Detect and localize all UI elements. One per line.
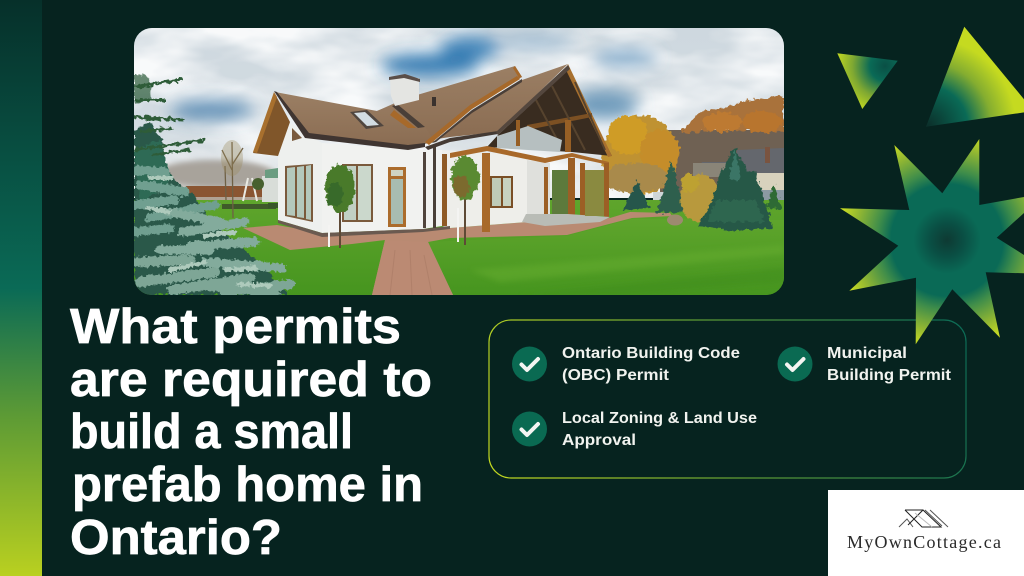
right lawn (479, 246, 784, 295)
permit text 3: Approval (562, 432, 636, 449)
house windows and door (285, 128, 513, 227)
permit text 2: Building Permit (827, 367, 951, 384)
logo box (828, 490, 1024, 576)
decorative triangle large (926, 27, 1024, 127)
title: prefab home in (72, 458, 423, 512)
background lawn (134, 200, 784, 295)
check icon 1 (512, 346, 547, 382)
logo icon: rooflines (899, 510, 948, 527)
middle ground hedges and play structure (221, 140, 281, 218)
house roof and gables (253, 64, 570, 156)
photo: house with lawn and trees (134, 28, 784, 295)
decorative triangle small (837, 53, 898, 109)
checklist panel (489, 320, 966, 478)
distant hillside and autumn trees (152, 96, 784, 206)
far white building (653, 147, 784, 200)
title: What permits (70, 300, 401, 354)
decorative eight-point star (840, 139, 1024, 344)
title: are required to (70, 353, 432, 407)
right side spruces and shrubs (623, 147, 782, 231)
large blue spruce at left (134, 75, 290, 295)
covered porch and timber posts (450, 64, 612, 232)
title: build a small (70, 405, 353, 459)
sky (134, 28, 784, 198)
house walls (278, 123, 550, 237)
title: Ontario? (70, 511, 282, 565)
small ornamental trees (325, 156, 479, 248)
permit text 3: Local Zoning & Land Use (562, 410, 757, 427)
logo wordmark: MyOwnCottage.ca (847, 532, 1001, 552)
permit text 1: Ontario Building Code (562, 345, 740, 362)
check icon 2 (778, 346, 812, 382)
left gradient bar (0, 0, 42, 576)
permit text 1: (OBC) Permit (562, 367, 669, 384)
check icon 3 (512, 412, 547, 446)
paved patio and walkway (243, 212, 672, 295)
permit text 2: Municipal (827, 345, 907, 362)
